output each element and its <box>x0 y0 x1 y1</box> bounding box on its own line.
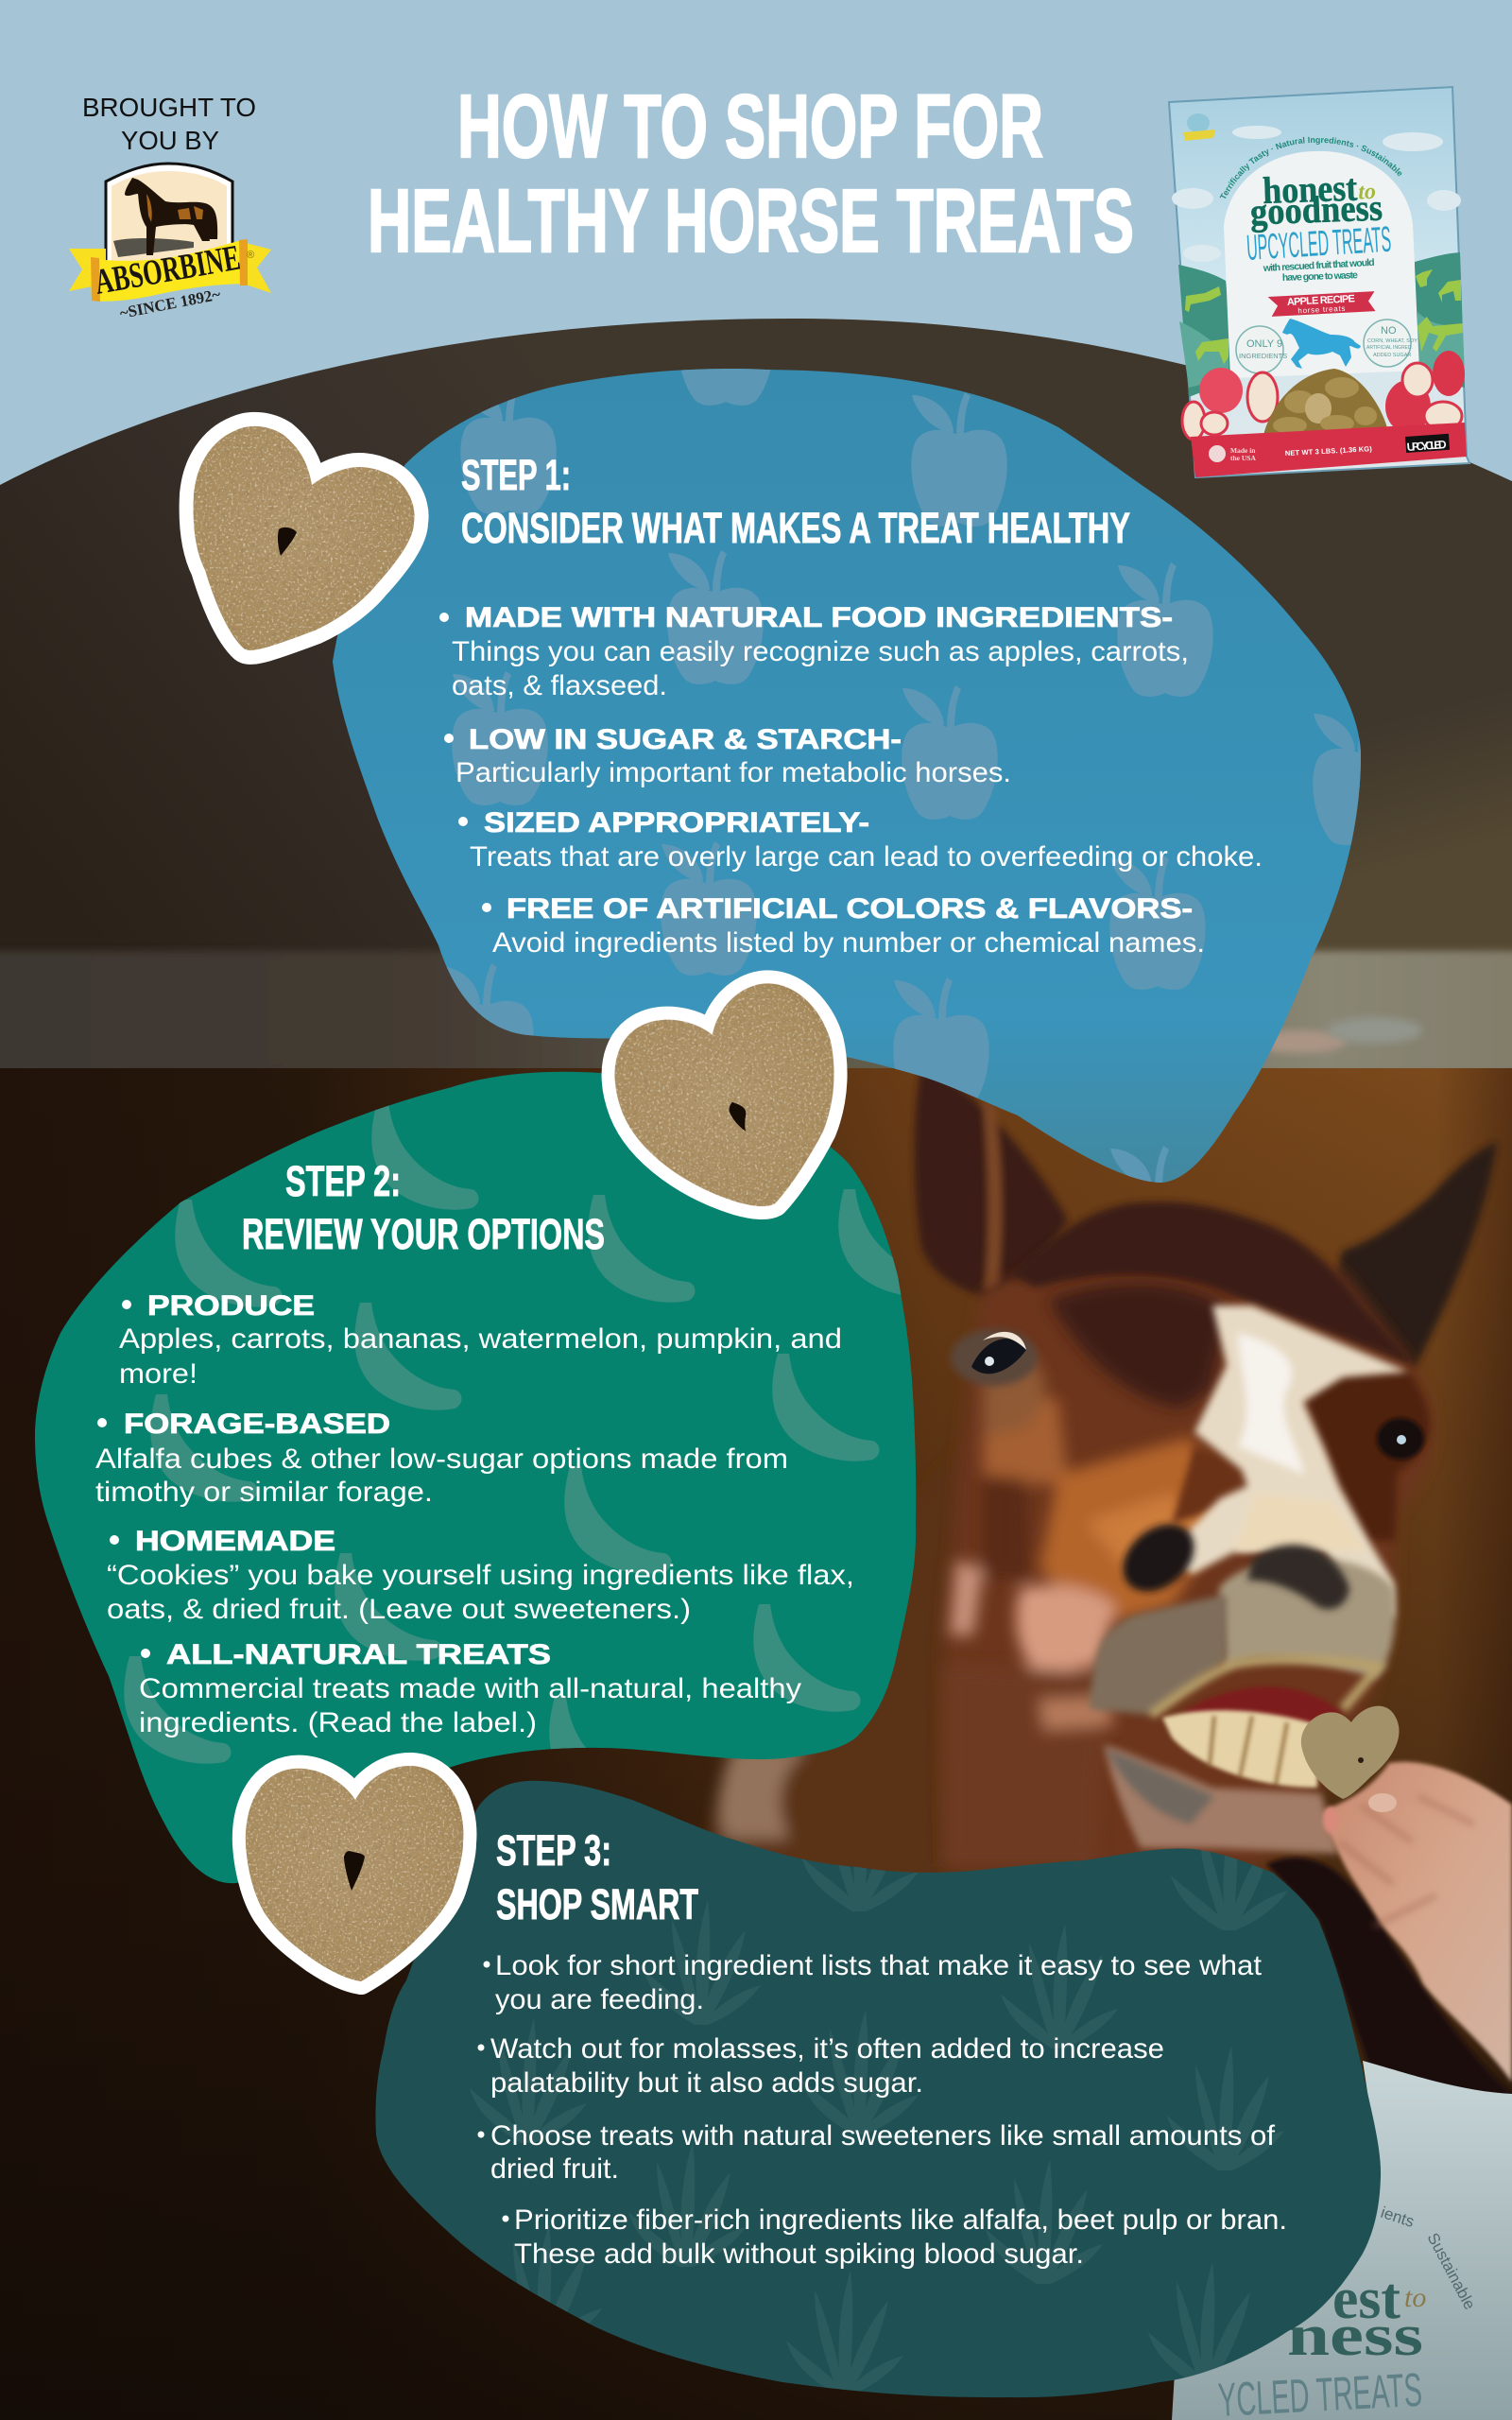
panel: step 1 <box>333 369 1361 1183</box>
step 1 heading: STEP 1: <box>461 451 571 499</box>
item: natural ingredients: MADE WITH NATURAL FOOD INGREDIENTS- <box>465 602 1173 633</box>
nostril <box>1110 1511 1207 1605</box>
bag left badge <box>1236 326 1287 373</box>
step 1 heading <box>461 451 1130 552</box>
logo ribbon band <box>90 239 248 302</box>
bag footer text: the USA <box>1230 454 1256 462</box>
right eye <box>1377 1418 1424 1460</box>
panel: step 3 <box>375 1781 1381 2397</box>
bag right badge: ADDED SUGAR <box>1373 353 1411 358</box>
item: natural sweeteners <box>478 2120 1276 2185</box>
logo ribbon tails <box>69 243 271 293</box>
item: free of artificial: FREE OF ARTIFICIAL COLORS & FLAVORS- <box>507 893 1193 925</box>
bag footer text: Made in <box>1230 446 1256 455</box>
step 3 heading: STEP 3: <box>496 1826 611 1875</box>
bag lime horses <box>1185 269 1463 364</box>
faded product bag in photo foreground: Sustainable <box>1423 2230 1479 2312</box>
step 2 heading: STEP 2: <box>285 1157 401 1205</box>
faded product bag in photo foreground: ients <box>1379 2204 1417 2231</box>
bag description: with rescued fruit that would <box>1263 257 1375 274</box>
nose shadow <box>1172 1446 1240 1524</box>
logo since line: ~SINCE 1892~ <box>118 285 222 322</box>
icon: heart cookie step 2 <box>597 968 873 1240</box>
bag curved tagline: Terrifically Tasty · Natural Ingredients · Sustainable <box>1219 136 1402 199</box>
faded product bag in photo foreground: ness <box>1287 2304 1423 2368</box>
icon: heart cookie step 3 <box>246 1766 463 1981</box>
bag recipe banner: APPLE RECIPE <box>1287 293 1355 308</box>
sponsor text: YOU BY <box>121 126 219 155</box>
photo: horse head with hand and treat <box>699 1063 1512 2122</box>
logo arch <box>106 164 232 269</box>
item: fiber-rich: Prioritize fiber-rich ingredients like alfalfa, beet pulp or bran. <box>514 2204 1287 2236</box>
bag brand: to <box>1358 180 1376 205</box>
bag red footer <box>1191 423 1467 477</box>
item: molasses: Watch out for molasses, it’s often added to increase <box>490 2033 1164 2065</box>
item: forage-based <box>95 1409 788 1508</box>
item: produce <box>119 1290 842 1390</box>
item: forage-based: Alfalfa cubes & other low-sugar options made from <box>95 1443 788 1475</box>
lower lip and jaw <box>1104 1745 1339 1854</box>
bag treat window <box>1263 369 1387 435</box>
item: all-natural treats: Commercial treats made with all-natural, healthy <box>139 1673 801 1704</box>
horse right ear <box>1323 1142 1497 1368</box>
step 1 list <box>439 602 1263 959</box>
muzzle <box>1090 1545 1395 1715</box>
item: molasses: palatability but it also adds sugar. <box>490 2067 923 2099</box>
bag hills <box>1178 252 1465 397</box>
step 3 heading: SHOP SMART <box>496 1880 698 1928</box>
item: sized appropriately: SIZED APPROPRIATELY- <box>484 807 869 838</box>
item: homemade: “Cookies” you bake yourself using ingredients like flax, <box>107 1560 854 1591</box>
horse neck <box>699 1418 1323 1891</box>
item: low sugar: Particularly important for metabolic horses. <box>455 757 1011 788</box>
item: homemade: HOMEMADE <box>135 1526 335 1557</box>
item: short ingredient lists: you are feeding. <box>495 1984 704 2015</box>
left eye <box>951 1329 1038 1386</box>
step 3 list <box>478 1950 1287 2270</box>
apple pattern <box>438 271 1409 1280</box>
banana pattern <box>124 1102 946 1805</box>
item: all-natural treats: ALL-NATURAL TREATS <box>166 1639 551 1670</box>
item: low sugar: LOW IN SUGAR & STARCH- <box>469 724 902 755</box>
title: HOW TO SHOP FOR <box>457 77 1043 177</box>
faded product bag in photo foreground: to <box>1404 2282 1426 2313</box>
item: free of artificial <box>482 893 1205 959</box>
item: produce: Apples, carrots, bananas, watermelon, pumpkin, and <box>119 1323 842 1355</box>
bag footer text <box>1209 434 1450 462</box>
item: homemade: oats, & dried fruit. (Leave out sweeteners.) <box>107 1594 691 1625</box>
item: all-natural treats: ingredients. (Read the label.) <box>139 1707 537 1738</box>
item: sized appropriately: Treats that are overly large can lead to overfeeding or choke. <box>470 841 1263 873</box>
bag mini logo <box>1183 113 1215 141</box>
sponsor text: BROUGHT TO <box>82 93 256 122</box>
bag left badge: ONLY 9 <box>1246 338 1282 350</box>
item: natural ingredients: oats, & flaxseed. <box>452 670 667 701</box>
teeth <box>1162 1710 1319 1788</box>
horse left ear <box>915 1063 1068 1297</box>
item: fiber-rich: These add bulk without spiking blood sugar. <box>514 2238 1084 2270</box>
item: fiber-rich <box>503 2204 1287 2270</box>
bag brand: honest <box>1262 166 1358 212</box>
logo registered mark: ® <box>247 250 254 261</box>
dark gap below muzzle <box>1266 1858 1512 2122</box>
step 2 list <box>95 1290 854 1738</box>
forehead patch <box>1049 1283 1228 1409</box>
item: produce: more! <box>119 1358 198 1390</box>
bag clouds <box>1172 126 1461 262</box>
mouth interior <box>1183 1686 1343 1730</box>
bag footer text: NET WT 3 LBS. (1.36 KG) <box>1285 444 1372 458</box>
item: free of artificial: Avoid ingredients listed by number or chemical names. <box>492 927 1205 959</box>
bag left badge: INGREDIENTS <box>1239 352 1287 360</box>
right eye patch <box>1307 1372 1430 1541</box>
item: short ingredient lists <box>484 1950 1263 2015</box>
item: forage-based: FORAGE-BASED <box>124 1409 390 1440</box>
bag right badge: NO <box>1381 325 1397 337</box>
grass pattern <box>470 1787 1288 2395</box>
item: produce: PRODUCE <box>147 1290 315 1322</box>
white blaze <box>1177 1305 1408 1618</box>
logo ribbon folds <box>91 239 248 302</box>
bag brand: goodness <box>1249 186 1383 233</box>
bag recipe banner: horse treats <box>1297 304 1346 315</box>
sponsor text <box>82 93 256 155</box>
step 3 heading <box>496 1826 698 1928</box>
cheek patches <box>945 1352 1228 1867</box>
logo wordmark: ABSORBINE <box>92 238 243 302</box>
faded product bag in photo foreground: est <box>1332 2267 1400 2331</box>
item: forage-based: timothy or similar forage. <box>95 1477 433 1508</box>
bag description <box>1263 257 1375 284</box>
bag brand <box>1248 165 1383 233</box>
logo: Absorbine <box>69 164 271 322</box>
item: short ingredient lists: Look for short ingredient lists that make it easy to see what <box>495 1950 1263 1981</box>
small treat in hand <box>1301 1706 1400 1799</box>
bag footer text: UPCYCLED <box>1406 438 1447 454</box>
panel: step 2 <box>35 1072 945 1883</box>
faded product bag in photo foreground <box>1172 2061 1512 2420</box>
horse face <box>942 1250 1434 1867</box>
bag recipe banner <box>1268 291 1376 317</box>
product bag <box>1168 86 1470 478</box>
item: natural ingredients <box>439 602 1189 701</box>
item: natural sweeteners: Choose treats with natural sweeteners like small amounts of <box>490 2120 1276 2152</box>
step 1 heading: CONSIDER WHAT MAKES A TREAT HEALTHY <box>461 504 1130 552</box>
item: sized appropriately <box>458 807 1263 873</box>
title <box>368 77 1134 271</box>
item: low sugar <box>444 724 1011 788</box>
logo horse <box>125 178 217 255</box>
logo ground <box>113 238 194 257</box>
bag white arch <box>1224 151 1419 378</box>
bag right badge <box>1364 320 1418 367</box>
forelock <box>1010 1201 1415 1365</box>
bag right badge: ARTIFICIAL INGRED. <box>1366 345 1413 351</box>
bag description: have gone to waste <box>1282 269 1358 284</box>
bag apples <box>1182 351 1465 440</box>
bag blue horse <box>1282 319 1361 369</box>
item: homemade <box>107 1526 854 1625</box>
bag right badge: CORN, WHEAT, SOY <box>1367 338 1418 344</box>
item: molasses <box>478 2033 1164 2099</box>
item: all-natural treats <box>139 1639 801 1738</box>
step 2 heading <box>242 1157 605 1258</box>
hand <box>1323 1762 1512 2083</box>
title: HEALTHY HORSE TREATS <box>368 171 1134 271</box>
item: natural sweeteners: dried fruit. <box>490 2153 619 2185</box>
icon: heart cookie step 1 <box>194 426 415 650</box>
item: natural ingredients: Things you can easily recognize such as apples, carrots, <box>452 636 1189 667</box>
step 2 heading: REVIEW YOUR OPTIONS <box>242 1210 605 1258</box>
